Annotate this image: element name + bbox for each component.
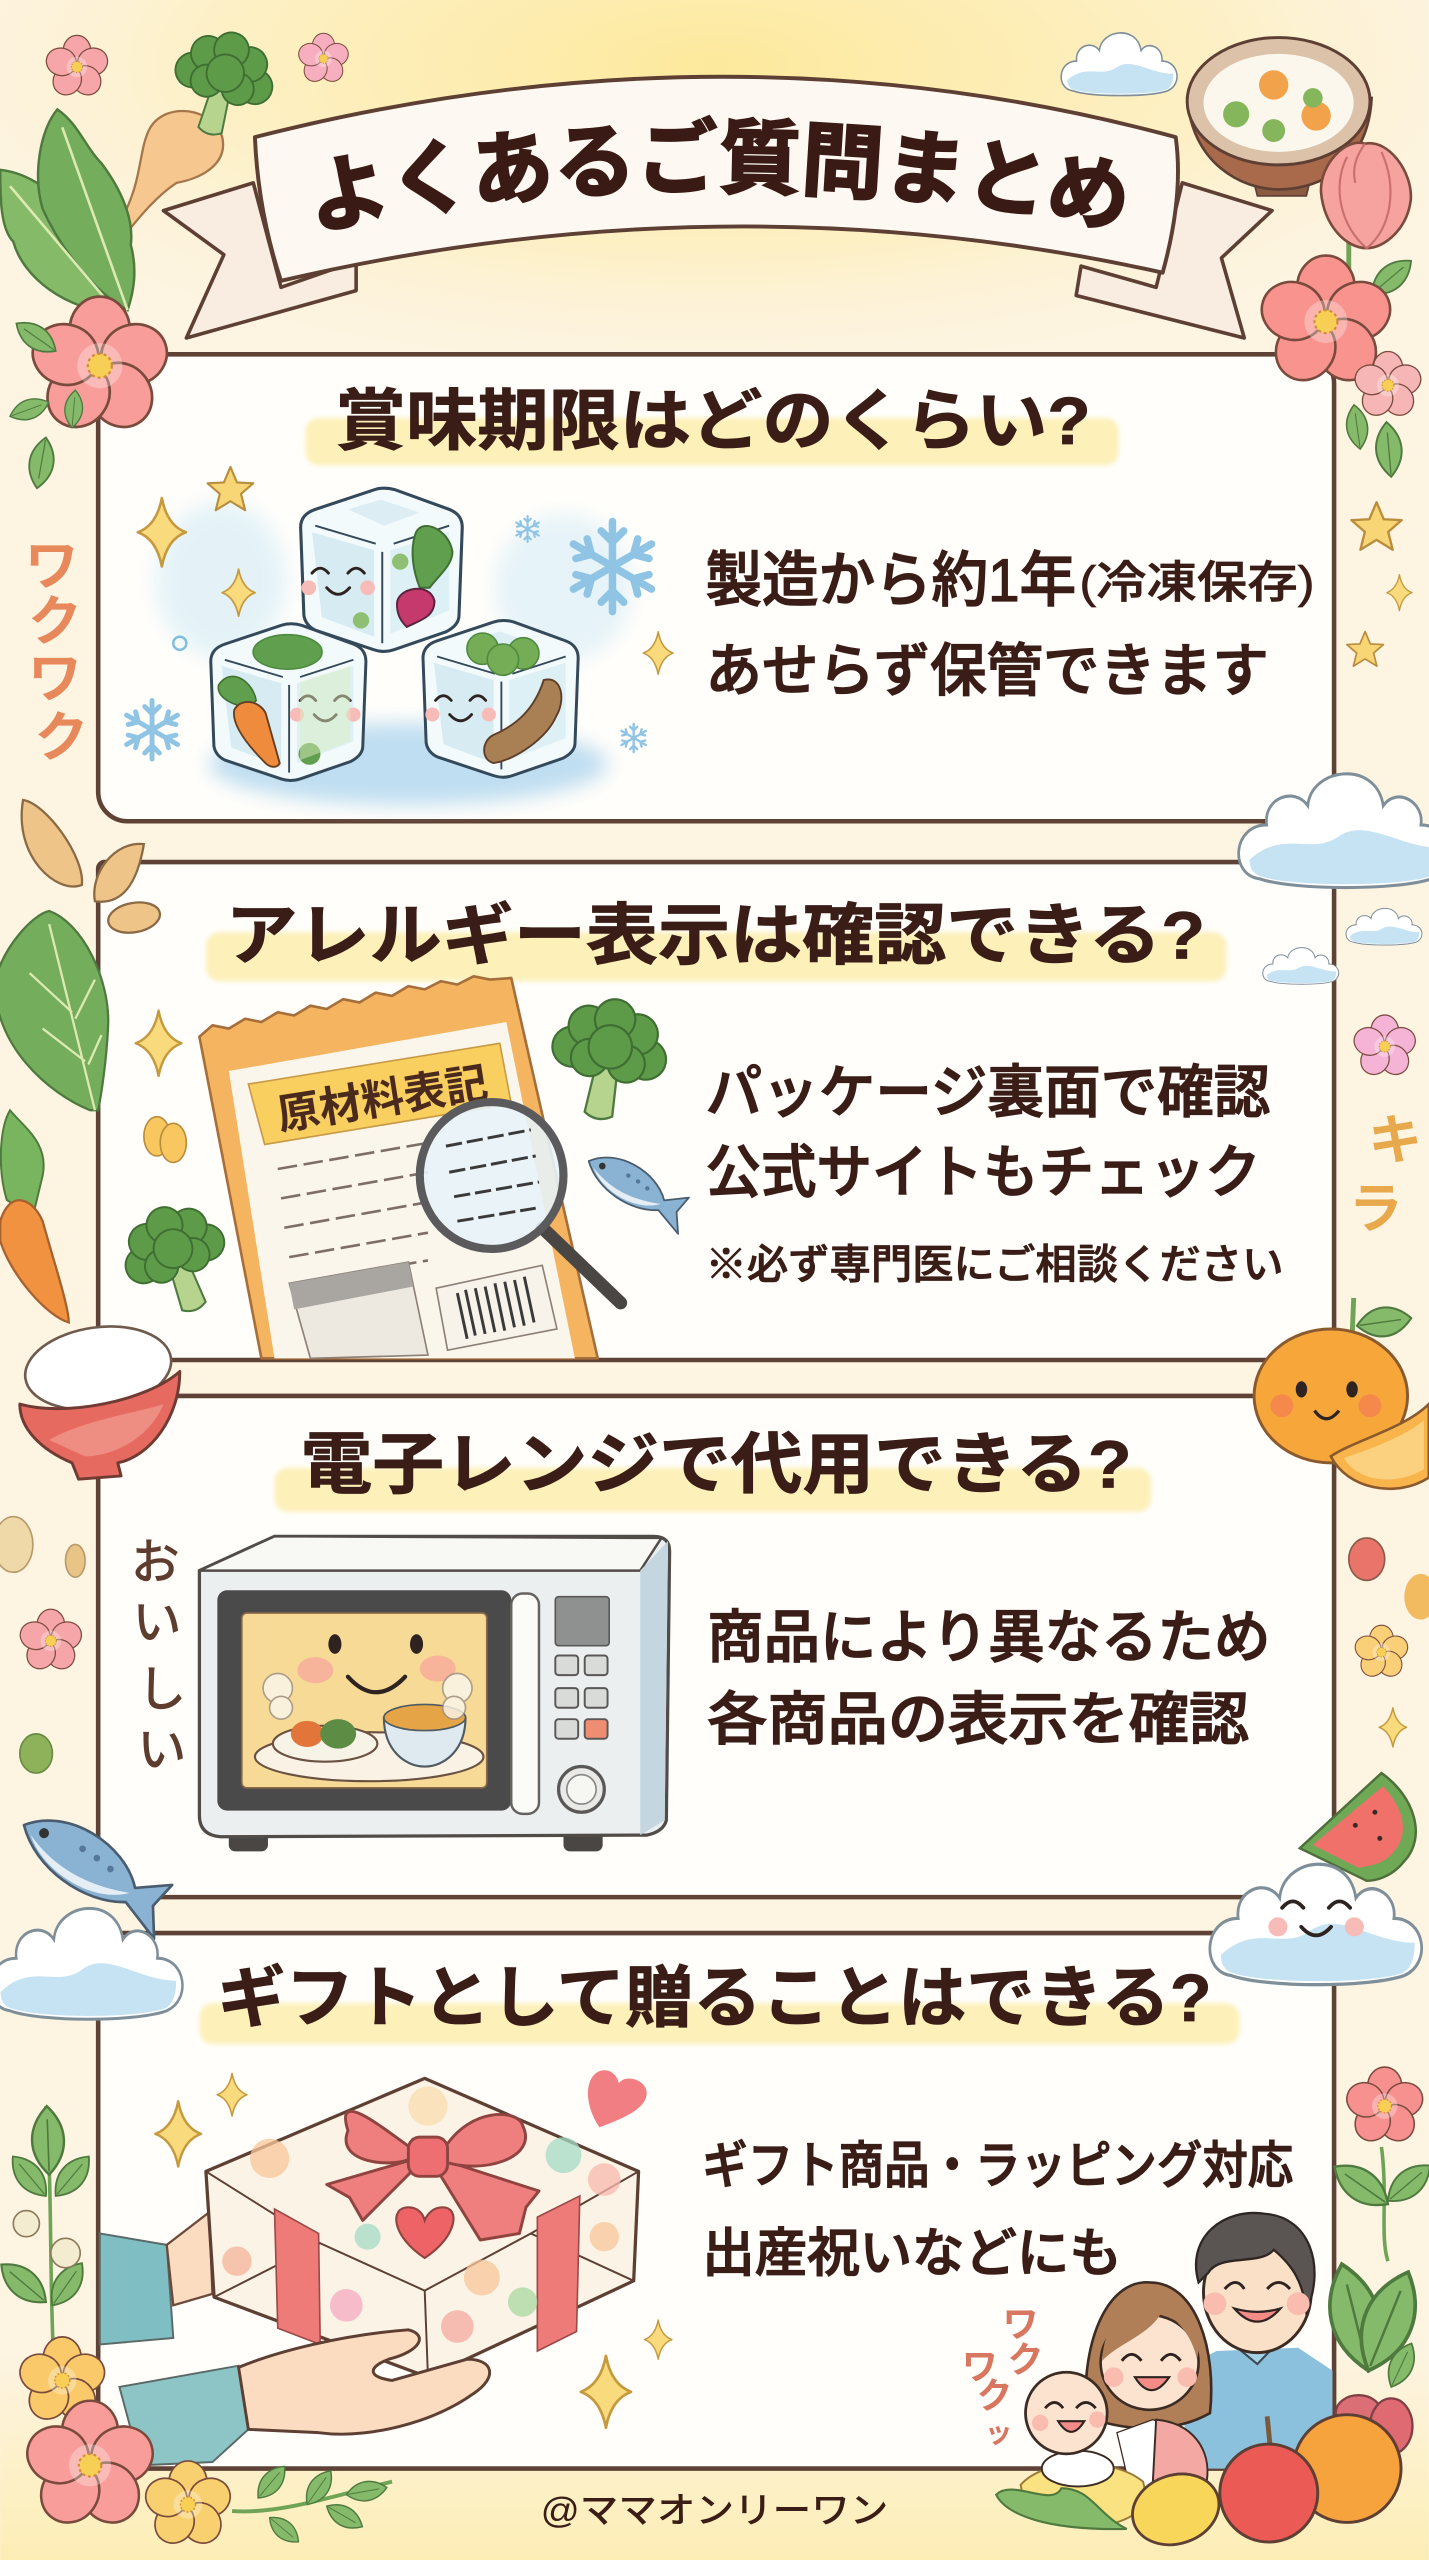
- icon: broccoli top: [541, 990, 675, 1129]
- answer text: allergy: ※必ず専門医にご相談ください: [706, 1241, 1283, 1287]
- icon: fish: [576, 1149, 695, 1234]
- sprig: bottom leaves: [232, 2460, 392, 2549]
- label: wakuwaku bottom: ワ: [1003, 2303, 1039, 2344]
- baby's green leaf: [996, 2488, 1127, 2529]
- icon: tiny snowflake right: [620, 724, 648, 752]
- illustration: gift box and hands: [100, 2070, 672, 2465]
- cloud: right small: [1346, 908, 1422, 945]
- vertical label: oishii: い: [137, 1724, 186, 1778]
- illustration: family: [996, 2213, 1401, 2556]
- flower: bottom-left pink: [20, 2401, 160, 2534]
- answer text: allergy: パッケージ裏面で確認: [706, 1061, 1270, 1125]
- mother: [1085, 2282, 1211, 2488]
- cloud: small blue: [1263, 948, 1339, 984]
- heading: gift: ギフトとして贈ることはできる?: [217, 1961, 1212, 2036]
- flower: lower left pink: [17, 1609, 85, 1674]
- flower: bottom-left yellow: [15, 2337, 110, 2427]
- package: [199, 976, 598, 1358]
- icon: tiny snowflake top: [515, 516, 540, 542]
- panel: shelf life: [98, 354, 1334, 821]
- heading: shelf life: 賞味期限はどのくらい?: [335, 384, 1091, 459]
- large leaf: [38, 109, 134, 310]
- apple fruit: [1220, 2416, 1318, 2542]
- illustration: frozen cubes: [123, 467, 673, 805]
- baby: [1021, 2372, 1145, 2524]
- icon: sparkle left: [138, 498, 186, 567]
- panel: gift: [98, 1933, 1334, 2469]
- plant: right leaves and radish: [1319, 2147, 1429, 2454]
- root vegetable: [118, 111, 223, 232]
- icon: red bean: [1349, 1538, 1385, 1580]
- answer text: allergy: 公式サイトもチェック: [706, 1141, 1261, 1205]
- ribbon bow: [327, 2111, 539, 2240]
- cloud: right large: [1239, 774, 1429, 888]
- control panel: [555, 1597, 609, 1812]
- illustration: microwave: [199, 1536, 670, 1851]
- icon: broccoli bottom: [110, 1191, 244, 1328]
- left leaf: [0, 170, 118, 313]
- heading: microwave: 電子レンジで代用できる?: [301, 1427, 1132, 1502]
- cloud: top right: [1061, 33, 1177, 96]
- answer text: gift: ギフト商品・ラッピング対応: [702, 2137, 1293, 2194]
- magnifier: [420, 1102, 621, 1303]
- answer text: gift: 出産祝いなどにも: [702, 2225, 1122, 2283]
- orange fruit: [1293, 2415, 1401, 2522]
- icon: sparkle small top: [217, 2073, 247, 2116]
- icon: sparkle bottom: [581, 2356, 631, 2428]
- answer text: microwave: 各商品の表示を確認: [707, 1688, 1249, 1752]
- icon: top cube: [301, 488, 462, 651]
- icon: right cube: [423, 620, 578, 777]
- orange slice: [1331, 1404, 1429, 1489]
- flower: bottom yellow: [141, 2461, 235, 2551]
- icon: left cube: [211, 624, 366, 780]
- icon: sparkle left: [155, 2101, 201, 2167]
- flower: right small mauve: [1350, 1015, 1419, 1080]
- icon: spinach: [0, 911, 108, 1110]
- label: wakuwaku left: [25, 536, 88, 768]
- icon: fish left: [3, 1807, 182, 1939]
- back hand: [100, 2212, 212, 2344]
- vertical label: oishii: い: [132, 1596, 181, 1650]
- label: kira: [1349, 1111, 1422, 1240]
- father: [1179, 2213, 1332, 2469]
- label: wakuwaku left: ク: [28, 592, 82, 652]
- gift box: [206, 2078, 639, 2377]
- label: wakuwaku left: ワ: [25, 536, 79, 596]
- answer text: shelf life: (冷凍保存): [1079, 559, 1314, 608]
- label: wakuwaku bottom: ッ: [985, 2417, 1012, 2448]
- icon: small snowflake left: [123, 700, 181, 759]
- flower: right large pink: [1254, 256, 1398, 392]
- title: よくあるご質問まとめ: [318, 114, 1124, 230]
- heart on box: [396, 2207, 454, 2258]
- label: wakuwaku bottom: [962, 2303, 1043, 2448]
- flower: top-left pink small: [43, 35, 111, 101]
- nuts: lower left: [0, 1517, 85, 1577]
- vertical label: oishii: お: [131, 1536, 180, 1590]
- flower: top pink small: [296, 33, 351, 86]
- icon: yellow beans: [144, 1117, 186, 1162]
- icon: soup bowl: [1187, 38, 1372, 196]
- panel: allergy: [98, 862, 1334, 1360]
- leaf: right of tulip: [1364, 252, 1419, 303]
- icon: green bean: [20, 1734, 52, 1773]
- icon: sparkle right: [643, 632, 673, 674]
- icon: rice bowl: [20, 1318, 180, 1479]
- answer text: gift: [702, 2137, 1293, 2283]
- front hand: [119, 2330, 490, 2465]
- nuts: left: [22, 800, 162, 937]
- cloud: left: [0, 1908, 182, 2019]
- answer text: shelf life: 製造から約1年: [706, 546, 1076, 614]
- leaves: right lower: [1344, 403, 1404, 478]
- banner: title ribbon: [162, 74, 1274, 340]
- heading: allergy: アレルギー表示は確認できる?: [226, 898, 1205, 973]
- icon: watermelon: [1300, 1773, 1416, 1881]
- label: wakuwaku bottom: ク: [1008, 2339, 1043, 2380]
- icon: yellow bean right: [1404, 1574, 1429, 1620]
- icon: sparkle: [136, 1011, 181, 1076]
- flower: right lower pink: [1342, 2067, 1427, 2148]
- footer credit: @ママオンリーワン: [541, 2489, 888, 2530]
- flower: right small pink: [1351, 352, 1425, 421]
- icon: star: [208, 467, 253, 510]
- label: wakuwaku left: ワ: [28, 649, 82, 709]
- plant: left sprigs: [0, 2106, 98, 2367]
- label: kira: ラ: [1349, 1180, 1403, 1240]
- icon: sparkle middle: [222, 569, 255, 616]
- package: 原材料表記: [274, 1059, 491, 1139]
- flower: right yellow: [1352, 1625, 1411, 1681]
- lemon fruit: [1123, 2463, 1228, 2556]
- label: wakuwaku bottom: ワ: [962, 2346, 998, 2387]
- food plate: [255, 1673, 483, 1781]
- label: wakuwaku bottom: ク: [977, 2375, 1012, 2416]
- icon: sparkle right small: [644, 2320, 672, 2359]
- icon: heart: [588, 2070, 647, 2127]
- vertical label: oishii: し: [137, 1663, 186, 1717]
- icon: tulip: [1321, 143, 1411, 294]
- answer text: microwave: 商品により異なるため: [707, 1606, 1270, 1670]
- panel: microwave: [98, 1396, 1334, 1897]
- broccoli: [161, 20, 284, 147]
- label: wakuwaku left: ク: [35, 708, 88, 768]
- answer text: shelf life: あせらず保管できます: [706, 640, 1269, 704]
- decoration: top-left greens and root: [0, 20, 284, 313]
- stars: right column: [1347, 502, 1412, 666]
- icon: orange with face: [1254, 1298, 1429, 1489]
- microwave face: [297, 1634, 456, 1692]
- icon: carrot: [0, 1110, 69, 1322]
- flower: left large pink: [25, 297, 175, 439]
- answer text: microwave: [707, 1606, 1270, 1752]
- leaves: left of flower: [7, 314, 84, 490]
- icon: sparkle right column: [1379, 1708, 1407, 1747]
- answer text: shelf life: [706, 546, 1314, 704]
- vertical label: oishii: [131, 1536, 186, 1778]
- cloud: face right: [1210, 1864, 1422, 1985]
- illustration: package and magnifier: [110, 976, 695, 1358]
- answer text: allergy: [706, 1061, 1283, 1287]
- label: kira: キ: [1368, 1111, 1422, 1171]
- icon: large snowflake: [568, 521, 657, 612]
